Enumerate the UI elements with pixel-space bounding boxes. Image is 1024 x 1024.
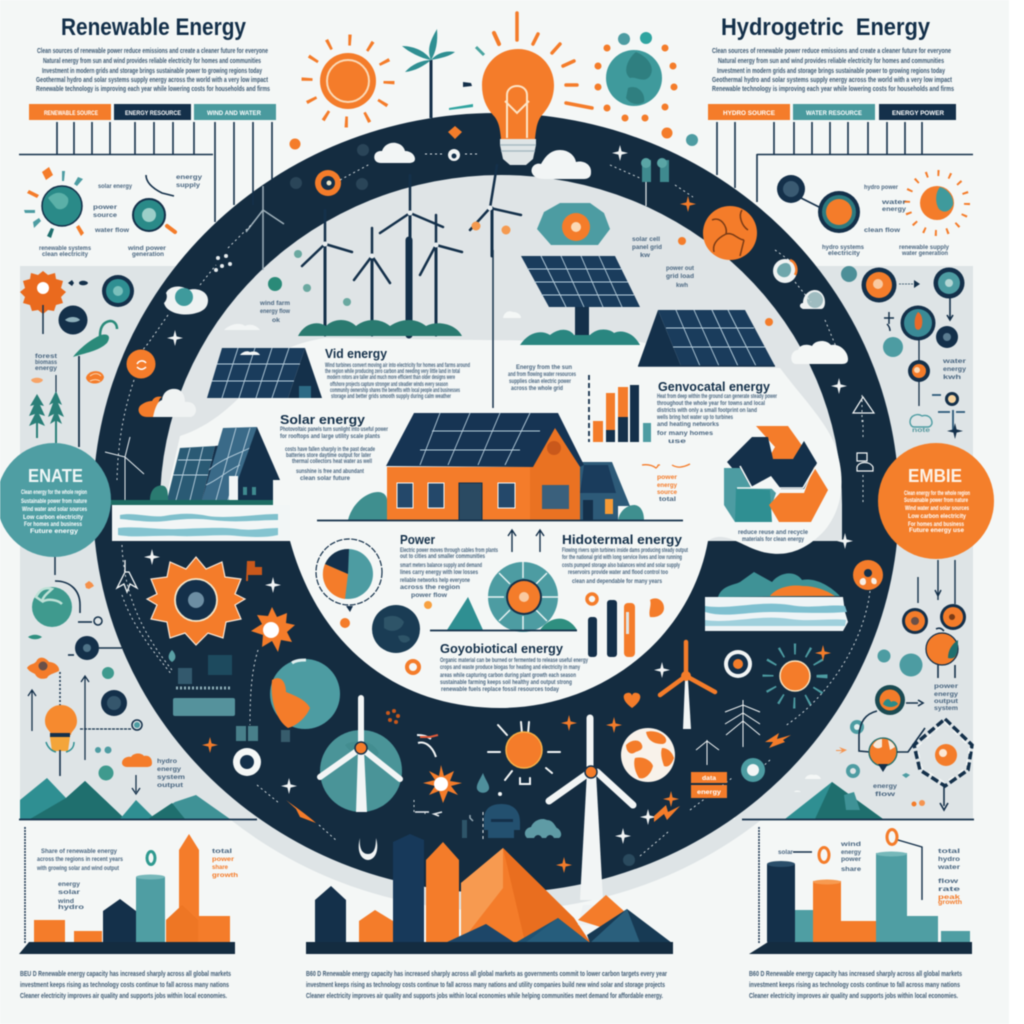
labels: left globe: solar energy <box>98 184 133 190</box>
icon: earth top <box>594 32 678 122</box>
title: Renewable Energy: Renewable Energy <box>61 14 247 41</box>
small orange labels: power <box>657 475 678 481</box>
circle: EMBIE <box>878 443 994 559</box>
hills behind house <box>348 492 644 520</box>
text block: bottom right <box>749 971 962 1000</box>
icon: world globe orange <box>621 728 675 782</box>
panel: right side column <box>735 266 973 819</box>
inner small dots and text: kw <box>640 253 650 259</box>
labels: right top: hydro power <box>864 185 899 191</box>
chart: bottom right: share <box>841 867 862 873</box>
leaf ball <box>926 628 958 665</box>
round window <box>547 441 561 455</box>
icon: right top dial group <box>777 175 860 233</box>
ring icons: right arc <box>773 250 874 549</box>
text block: right intro: Clean sources of renewable power reduce emissions and create a cleaner future for everyone <box>712 48 951 55</box>
labels: left globe: supply <box>176 183 201 189</box>
labels: right top: water generation <box>901 251 948 257</box>
pie chart <box>316 539 382 612</box>
chart: bottom left: Share of renewable energy <box>41 849 118 855</box>
text block: hidotermal energy <box>562 548 688 585</box>
icon: left globe with rays <box>24 167 84 238</box>
text block: hidotermal energy: costs pumped storage also balances wind and solar supply <box>562 563 680 569</box>
heading: Solar energy: Solar energy <box>280 412 366 427</box>
circle: ENATE: Clean energy for the whole region <box>21 489 87 496</box>
text block: right intro: Geothermal hydro and solar systems supply energy across the world with a very low impact <box>712 77 953 84</box>
solar panel A <box>520 256 640 345</box>
circle: ENATE <box>0 443 111 557</box>
chart: bottom left: across the regions in recent years <box>37 857 124 863</box>
chart: bottom left <box>19 827 238 954</box>
chart: bottom right: flow <box>938 879 959 885</box>
inner small dots and text: wind farm <box>259 301 290 307</box>
dark ring <box>93 113 899 893</box>
icon: right sun globe <box>907 173 967 233</box>
text block: genvocatal energy: for many homes <box>657 431 714 437</box>
bar chart: center right <box>589 375 651 442</box>
turbine: large white <box>549 718 633 900</box>
legend bars left: RENEWABLE SOURCE <box>44 110 98 117</box>
ring icons: lower right <box>724 560 883 782</box>
inner small dots and text: power out <box>666 266 694 272</box>
left panel icons lower: hydro <box>157 759 177 765</box>
legend bars right: HYDRO SOURCE <box>723 110 776 117</box>
labels: left globe: power <box>93 205 118 211</box>
timeline ticks left <box>19 122 272 222</box>
text block: hidotermal energy: clean and dependable for many years <box>572 579 663 585</box>
labels: left globe: wind power <box>127 246 167 252</box>
legend bars right <box>708 104 956 120</box>
text block: solar energy: for rooftops and large utility scale plants <box>280 434 381 440</box>
text block: under recycle: reduce reuse and recycle <box>738 530 809 536</box>
labels: left globe: generation <box>132 252 164 258</box>
ring target <box>724 650 752 678</box>
chart: bottom right: water <box>937 865 961 871</box>
text block: bottom center: B60 D Renewable energy capacity has increased sharply across all global markets as governments commit to lower carbon targets every year <box>306 971 667 978</box>
right panel icons lower: output <box>934 699 958 705</box>
text block: bottom left: investment keeps rising as technology costs continue to fall across many nations <box>20 982 229 989</box>
icon: light bulb <box>449 13 592 165</box>
text block: vid energy: modern rotors are taller and much more efficient than older designs were <box>327 375 455 381</box>
timeline ticks right <box>717 122 973 202</box>
windows <box>397 483 413 508</box>
cloud car <box>525 819 561 838</box>
circle: ENATE: ENATE <box>28 466 83 486</box>
inner small dots and text: kwh <box>676 283 688 289</box>
icon: dark globe <box>372 605 420 653</box>
house body <box>387 467 580 520</box>
icon: landscape with water <box>705 572 848 631</box>
clouds and line in inner area <box>224 250 521 408</box>
text block: upper center: and from flowing water resources <box>508 372 576 378</box>
icon: teal wheel with mountains <box>430 562 577 632</box>
text block: goyobiotical energy: crops and waste produce biogas for heating and electricity in many <box>440 665 580 671</box>
text block: genvocatal energy: Heat from deep within the ground can generate steady power <box>657 394 777 400</box>
right panel icons lower: flow <box>875 792 896 798</box>
labels: right top: hydro systems <box>822 245 865 251</box>
text block: upper center: across the whole grid <box>511 386 563 392</box>
mountains: left <box>20 778 230 819</box>
text block: solar energy: costs have fallen sharply in the past decade <box>285 447 375 453</box>
icon: small white tower <box>696 740 719 765</box>
text block: solar energy: Photovoltaic panels turn sunlight into useful power <box>280 427 388 433</box>
annex <box>580 462 630 520</box>
chart: bottom right <box>749 827 972 954</box>
solar panel B <box>638 310 775 366</box>
right panel icons lower <box>794 560 972 810</box>
text block: hidotermal energy: reservoirs provide water and flood control too <box>568 570 668 576</box>
text block: power: reliable networks help everyone <box>400 578 471 584</box>
left panel icons lower: energy <box>157 767 182 773</box>
labels: left globe: source <box>93 213 118 219</box>
text block: right intro: Natural energy from sun and wind provides reliable electricity for homes and communities <box>718 58 944 65</box>
text block: bottom center: Cleaner electricity improves air quality and supports jobs within local economies while helping communities meet demand for affordable energy. <box>306 993 663 1000</box>
circle: ENATE: Wind water and solar sources <box>22 506 87 513</box>
text block: power: lines carry energy with low losses <box>400 570 479 576</box>
chart: bottom left: power <box>212 857 235 863</box>
right panel icons upper: kwh <box>943 375 962 381</box>
orange flower <box>27 658 59 679</box>
main house <box>348 413 644 520</box>
icon: small turbine top <box>402 29 455 118</box>
heading: Genvocatal energy: Genvocatal energy <box>658 379 771 394</box>
text block: left intro: Renewable technology is improving each year while lowering costs for households and firms <box>36 86 270 93</box>
labels: right top: water <box>880 200 907 206</box>
text block: goyobiotical energy: areas while capturing carbon during plant growth each season <box>440 673 576 679</box>
text block: hidotermal energy: for the national grid with long service lives and low running <box>562 555 682 561</box>
left panel icons lower: system <box>157 775 185 781</box>
text block: bottom center <box>306 971 667 1000</box>
inner small dots and text: solar cell <box>632 237 660 243</box>
text block: bottom left: Cleaner electricity improves air quality and supports jobs within local economies. <box>20 993 227 1000</box>
ring halo <box>232 819 760 910</box>
chart: bottom right: energy <box>841 850 862 856</box>
panel: left side column <box>20 266 260 819</box>
text block: goyobiotical energy: Organic material can be burned or fermented to release useful energy <box>440 658 588 664</box>
central turbine mast lower <box>578 905 603 925</box>
labels: left globe: renewable systems <box>39 246 92 252</box>
chart: bottom left: total <box>212 849 233 855</box>
inner small dots and text <box>259 222 773 326</box>
circle: EMBIE: For homes and business <box>908 521 964 528</box>
pine tower <box>725 700 760 747</box>
icon: left house with panels <box>110 427 280 505</box>
circle: ENATE: For homes and business <box>24 521 82 528</box>
text block: under recycle: materials for clean energy <box>742 537 805 543</box>
text block: vid energy: storage and better grids smooth supply during calm weather <box>331 394 451 400</box>
chart: bottom left: with growing solar and wind output <box>36 866 119 872</box>
chart: bottom left: growth <box>212 873 238 879</box>
icon: left teal dial <box>133 175 175 232</box>
legend bars left: ENERGY RESOURCE <box>125 110 182 117</box>
text block: solar energy: batteries store daytime output for later <box>286 453 372 459</box>
labels: right top <box>822 185 950 257</box>
inner small dots and text: grid load <box>666 274 694 280</box>
text block: vid energy <box>325 363 470 400</box>
split ball <box>869 738 897 772</box>
circle: EMBIE: Low carbon electricity <box>908 513 966 520</box>
text block: power: Electric power moves through cables from plants <box>400 548 498 554</box>
text block: bottom left <box>20 971 231 1000</box>
teal rayed sun <box>768 649 822 703</box>
text block: left intro <box>36 48 270 93</box>
legend bars left <box>29 104 276 120</box>
text block: power <box>400 548 498 599</box>
icon: cracked orange planet <box>703 206 757 260</box>
text block: solar energy: thermal collectors heat water as well <box>292 459 372 465</box>
text block: goyobiotical energy: renewable fuels replace fossil resources today <box>441 687 560 693</box>
mountain: right <box>785 782 883 819</box>
green lamp <box>73 321 117 447</box>
text block: right intro: Renewable technology is improving each year while lowering costs for households and firms <box>712 86 954 93</box>
chart: bottom right: total <box>938 849 961 855</box>
icon: orange gear sun <box>147 557 245 645</box>
ring icons: top arc <box>200 126 696 285</box>
turbine: white on teal globe <box>320 698 402 812</box>
orange bulb <box>45 705 77 776</box>
text block: upper center: supplies clean electric power <box>509 379 571 385</box>
small orange labels: source <box>657 490 678 496</box>
globe <box>32 581 92 627</box>
circle: EMBIE: Clean energy for the whole region <box>904 490 970 497</box>
text block: power: power flow <box>411 593 447 599</box>
pine trees <box>29 375 64 443</box>
chart: bottom left: solar <box>58 890 81 896</box>
circle: ENATE: Future energy <box>30 528 78 535</box>
icon: teal orange planet <box>270 659 340 729</box>
right panel icons lower: power <box>934 684 959 690</box>
text block: genvocatal energy <box>656 394 777 445</box>
arrows center <box>508 530 544 552</box>
text block: upper center: Energy from the sun <box>516 365 572 371</box>
icon: recycle hexagon <box>724 426 828 522</box>
inner small dots and text: ok <box>272 318 281 324</box>
text block: genvocatal energy: throughout the whole year for towns and local <box>657 401 765 407</box>
circle: EMBIE: Wind water and solar sources <box>905 505 969 512</box>
chart: bottom right: peak <box>938 895 961 901</box>
ring icons: left arc <box>105 287 208 670</box>
solar panel C <box>207 348 322 398</box>
left panel icons lower: output <box>157 783 183 789</box>
water strip <box>112 505 290 540</box>
icon: orange sun with white rays <box>488 722 560 784</box>
text block: vid energy: Wind turbines convert moving air into electricity for homes and farms around <box>325 363 470 369</box>
text block: power: across the region <box>400 585 460 591</box>
heading: Power: Power <box>400 532 435 547</box>
center ring icons <box>286 662 732 873</box>
text block: genvocatal energy: districts with only a small footprint on land <box>657 408 757 414</box>
text block: genvocatal energy: wells bring hot water up to turbines <box>656 415 733 421</box>
labels: right top: clean flow <box>864 228 900 234</box>
icon: teal hexagon with orange core <box>537 203 610 245</box>
chart: bottom center <box>306 834 673 954</box>
heading: Hidotermal energy: Hidotermal energy <box>562 532 683 547</box>
gear flower <box>20 271 66 334</box>
accent dots around top <box>290 128 698 150</box>
house baseline <box>317 520 683 522</box>
right baseline <box>742 818 974 820</box>
left panel icons lower <box>27 557 185 794</box>
inner small dots and text: energy flow <box>260 309 290 315</box>
text block: vid energy: community ownership shares the benefits with local people and businesses <box>330 388 460 394</box>
text block: bottom left: BEU D Renewable energy capacity has increased sharply across all global markets <box>20 971 231 978</box>
chart: bottom right: rate <box>938 887 961 893</box>
right panel icons lower: system <box>934 706 958 712</box>
chart: bottom right: solar <box>778 850 794 856</box>
text block: genvocatal energy: and heating networks <box>657 422 720 428</box>
text block: hidotermal energy: Flowing rivers spin turbines inside dams producing steady output <box>562 548 688 554</box>
small orange labels: energy <box>657 483 678 489</box>
inner white panel <box>112 338 842 708</box>
left panel icons upper: energy <box>35 366 58 372</box>
title: Hydrogetric Energy: Hydrogetric Energy <box>721 14 931 41</box>
text block: under recycle <box>738 530 809 543</box>
blue machine <box>484 804 520 838</box>
labels: right top: energy <box>882 207 907 213</box>
text block: vid energy: offshore projects capture stronger and steadier winds every season <box>330 382 448 388</box>
orange tags: energy <box>697 789 721 796</box>
legend bars right: WATER RESOURCE <box>806 110 863 117</box>
text block: bottom right: Cleaner electricity improves air quality and supports jobs within local economies. <box>749 993 958 1000</box>
legend bars right: ENERGY POWER <box>892 110 944 117</box>
turbine: orange blades <box>660 642 715 729</box>
text block: power: smart meters balance supply and demand <box>400 563 482 569</box>
chart: bottom left: hydro <box>58 905 85 911</box>
circle: EMBIE: Future energy use <box>909 527 964 534</box>
left baseline <box>19 818 257 820</box>
heading: Vid energy: Vid energy <box>325 346 388 361</box>
labels: right top: electricity <box>828 251 861 257</box>
inner grey area <box>160 175 842 541</box>
circle: EMBIE: EMBIE <box>908 466 962 486</box>
orange tags <box>691 772 727 798</box>
ring icons: lower left <box>117 549 297 803</box>
chart: bottom right: growth <box>938 900 962 906</box>
right panel icons upper <box>841 266 967 439</box>
labels: left globe: energy <box>176 175 203 181</box>
text block: left intro: Investment in modern grids and storage brings sustainable power to growing regions today <box>42 68 262 75</box>
right panel icons upper: note <box>912 428 931 434</box>
text block: left intro: Geothermal hydro and solar systems supply energy across the world with a very low impact <box>36 77 269 84</box>
labels: right top: renewable supply <box>899 245 950 251</box>
text block: solar energy: clean solar future <box>300 476 351 482</box>
text block: goyobiotical energy: sustainable farming keeps soil healthy and output strong <box>440 680 572 686</box>
text block: upper center <box>508 365 576 392</box>
text block: solar energy: sunshine is free and abundant <box>296 469 364 475</box>
right panel icons upper: energy <box>943 367 967 373</box>
turbines: inner group <box>298 165 521 336</box>
chart: bottom right: hydro <box>938 857 960 863</box>
chart: bottom right: power <box>841 857 862 863</box>
chart: bottom right: wind <box>840 842 861 848</box>
text block: power: out to cities and smaller communities <box>400 554 486 560</box>
text block: vid energy: the region while producing zero carbon and needing very little land in total <box>325 369 460 375</box>
hex network <box>914 719 972 786</box>
left panel icons upper: biomass <box>35 360 58 366</box>
circle: EMBIE: Sustainable power from nature <box>904 497 968 504</box>
text block: bottom right: investment keeps rising as technology costs continue to fall across many nations <box>749 982 960 989</box>
chart: bottom left: energy <box>58 882 81 888</box>
text block: genvocatal energy: use <box>668 439 687 445</box>
labels: left globe: water flow <box>94 228 129 234</box>
thermometer bars <box>588 600 635 657</box>
chart: bottom left: wind <box>57 899 74 905</box>
small spiky sun <box>423 765 462 803</box>
left panel icons upper: forest <box>35 354 57 360</box>
right panel icons lower: energy <box>934 692 959 698</box>
legend bars left: WIND AND WATER <box>207 110 261 117</box>
circle: ENATE: Sustainable power from nature <box>21 498 87 505</box>
text block: left intro: Natural energy from sun and wind provides reliable electricity for homes and communities <box>43 58 261 65</box>
text block: bottom center: investment keeps rising as technology costs continue to fall across many nations and utility companies build new wind solar and storage projects <box>306 982 665 989</box>
orange tags: data <box>702 775 716 782</box>
right panel icons lower: energy <box>873 784 898 790</box>
circle: ENATE: Low carbon electricity <box>23 514 83 521</box>
chart: bottom left: share <box>212 865 229 871</box>
right panel icons upper: water <box>942 359 967 365</box>
text block: goyobiotical energy <box>440 658 588 693</box>
left panel icons upper <box>20 271 134 447</box>
roof <box>386 413 584 467</box>
labels: left globe <box>39 175 203 258</box>
inner small dots and text: panel grid <box>632 245 662 251</box>
text block: left intro: Clean sources of renewable power reduce emissions and create a cleaner future for everyone <box>37 48 268 55</box>
heading: Goyobiotical energy: Goyobiotical energy <box>440 641 564 656</box>
text block: right intro <box>712 48 954 93</box>
text block: right intro: Investment in modern grids and storage brings sustainable power to growing regions today <box>717 68 945 75</box>
small sun <box>251 607 295 652</box>
labels: left globe: clean electricity <box>42 252 89 258</box>
small orange labels <box>642 464 690 503</box>
small orange labels: total <box>659 497 676 503</box>
text block: solar energy <box>280 427 388 482</box>
icon: sun top <box>307 40 389 122</box>
text block: bottom right: B60 D Renewable energy capacity has increased sharply across all global markets <box>749 971 962 978</box>
small orange markers <box>340 594 664 673</box>
